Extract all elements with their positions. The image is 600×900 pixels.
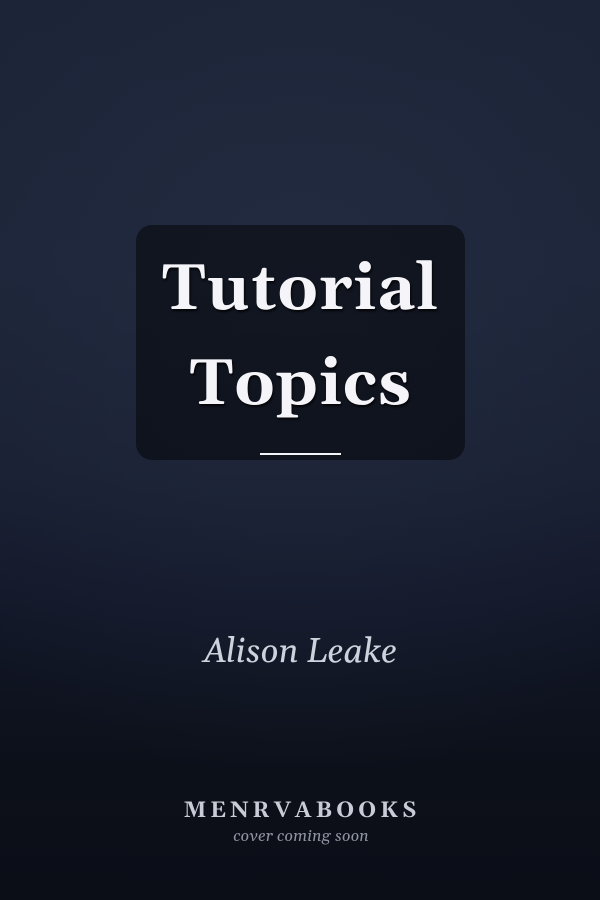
cover note: cover coming soon: [233, 827, 369, 847]
panel: title card: Topics: [190, 345, 412, 426]
title underline: [260, 453, 341, 455]
title: [162, 250, 439, 426]
panel: title card: Tutorial: [162, 250, 439, 331]
author name: Alison Leake: [203, 630, 397, 674]
panel: title card: [136, 225, 465, 460]
publisher name: MENRVABOOKS: [184, 797, 420, 825]
